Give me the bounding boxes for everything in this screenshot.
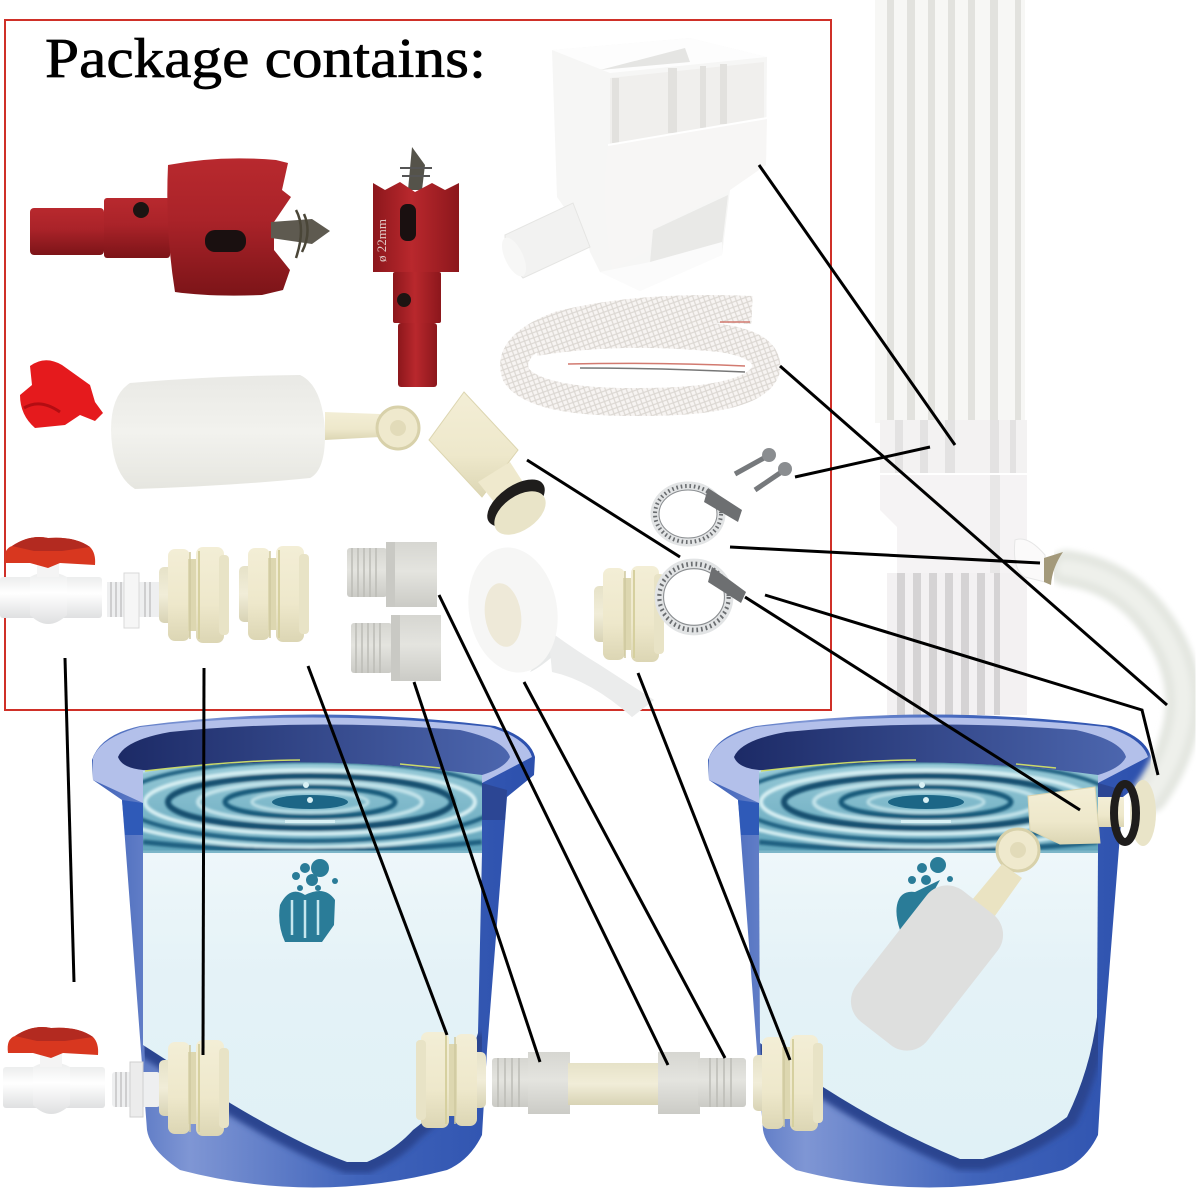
right bucket water: [759, 853, 1098, 1159]
installed threaded adapter: [112, 1062, 160, 1117]
clear braided hose: [514, 309, 766, 402]
installed bulkhead left: [159, 1040, 229, 1136]
rain diverter: [497, 38, 767, 291]
hose clamp upper: [655, 486, 742, 542]
hole saw small: [373, 147, 459, 387]
left bucket water: [143, 853, 482, 1162]
hole saw small: ø 22mm: [374, 219, 389, 262]
hole saw large: [30, 158, 330, 296]
right bucket: [708, 714, 1151, 1188]
hose clamp lower: [659, 564, 746, 630]
left bubbles: [279, 859, 338, 942]
float valve in package: [111, 375, 554, 544]
title: Package contains:: [45, 28, 486, 90]
installed bulkhead right: [753, 1035, 823, 1131]
installed bulkhead middle: [416, 1032, 486, 1128]
hose clamp fitting: [1044, 552, 1063, 585]
red package frame: [5, 20, 831, 710]
red cap: [20, 360, 103, 428]
ball valve in package: [0, 537, 102, 624]
right bubbles: [896, 857, 953, 930]
screws: [735, 448, 792, 490]
installed ball valve: [3, 1027, 105, 1114]
bulkhead fitting 3: [594, 566, 664, 662]
downspout: [875, 0, 1045, 715]
leader lines: [65, 165, 1167, 1065]
bulkhead fitting 1: [159, 547, 229, 643]
threaded coupler 2: [351, 615, 441, 681]
threaded adapter in package: [107, 573, 159, 628]
threaded coupler 1: [347, 542, 437, 607]
corrugated hose to right bucket: [1066, 568, 1183, 795]
left bucket: [92, 714, 535, 1188]
PTFE tape roll: [459, 540, 654, 717]
installed float valve: [840, 780, 1156, 1061]
bulkhead fitting 2: [239, 546, 309, 642]
connector pipe: [492, 1052, 746, 1114]
